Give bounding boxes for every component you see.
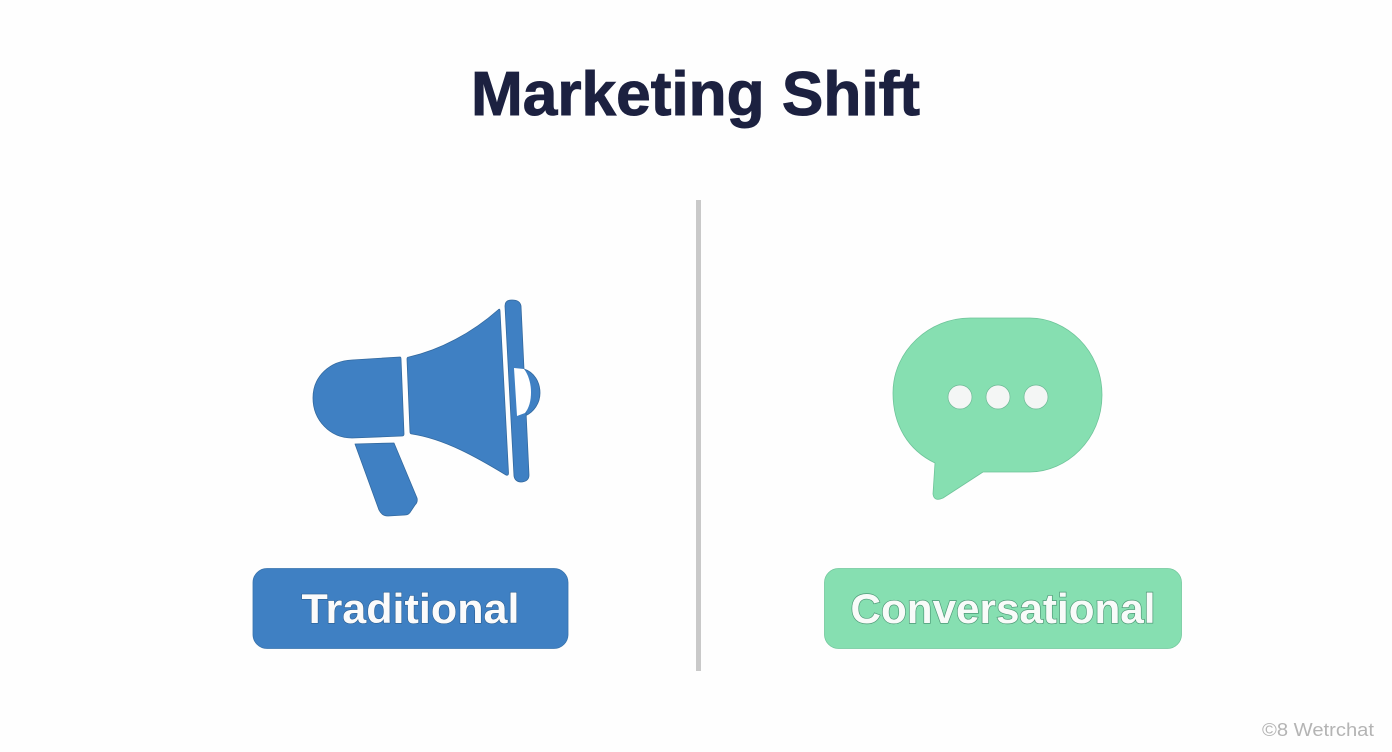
bubble shape (893, 318, 1102, 499)
label: traditional (253, 568, 568, 648)
conversational pill (824, 568, 1182, 648)
megaphone rear body (313, 357, 404, 438)
traditional pill (253, 568, 568, 648)
center divider (696, 200, 701, 671)
megaphone cone (407, 309, 508, 475)
megaphone front sound cap (524, 369, 540, 416)
conversational text: Conversational (850, 585, 1156, 632)
icon: megaphone (313, 300, 540, 516)
traditional text: Traditional (302, 585, 520, 632)
megaphone front rim (505, 300, 529, 482)
megaphone rim cutout (514, 368, 531, 416)
title: Marketing Shift (471, 60, 920, 129)
icon: speech bubble (893, 318, 1102, 499)
watermark: ©8 Wetrchat (1262, 720, 1374, 740)
megaphone handle (355, 443, 417, 516)
label: conversational (824, 568, 1182, 648)
typing dots (948, 385, 1048, 409)
